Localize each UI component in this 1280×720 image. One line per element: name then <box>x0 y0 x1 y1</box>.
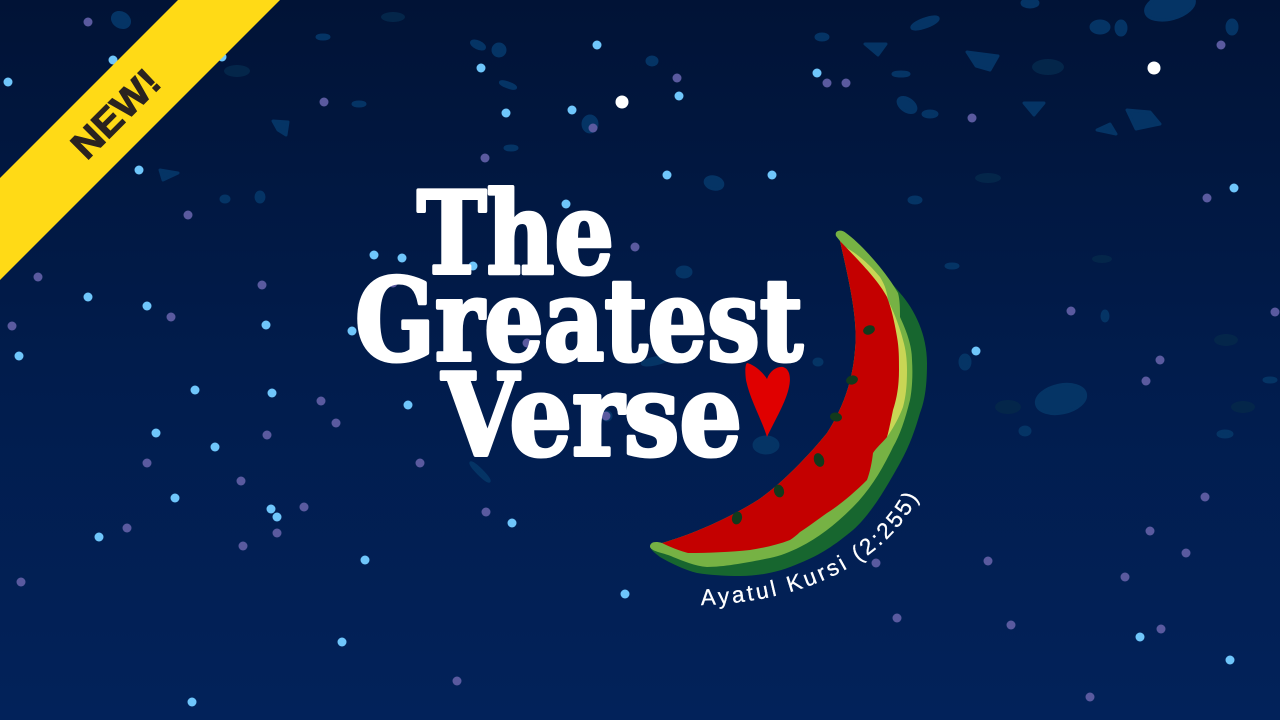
title <box>355 167 803 482</box>
curved subtitle: Ayatul Kursi (2:255) <box>700 494 920 609</box>
corner ribbon: NEW! <box>63 61 169 167</box>
icon: watermelon crescent <box>650 231 927 576</box>
title: The <box>417 167 614 300</box>
corner ribbon <box>0 0 280 280</box>
white stars <box>616 62 1160 108</box>
icon: red heart <box>745 363 790 437</box>
title: Verse <box>441 349 742 482</box>
teal petal shapes <box>110 0 1276 483</box>
faint dark green flecks <box>224 12 1255 414</box>
watermelon seeds <box>730 324 876 526</box>
title: Greatest <box>355 254 803 387</box>
